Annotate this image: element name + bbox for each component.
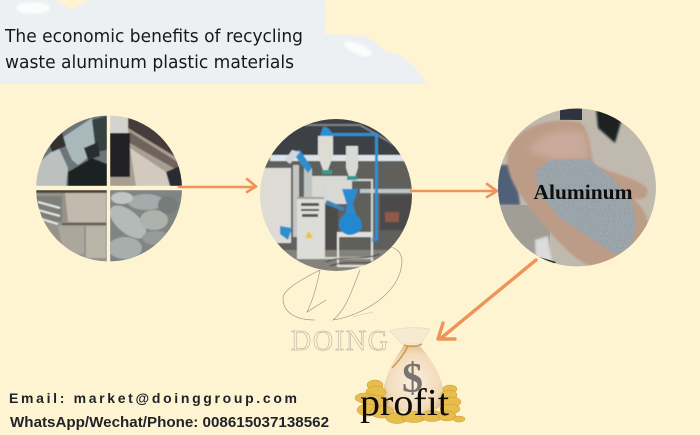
arrow: scrap to machine bbox=[179, 179, 256, 192]
hand bbox=[507, 120, 648, 266]
circle photo: hand with aluminum powder bbox=[495, 105, 660, 270]
label: Aluminum: Aluminum bbox=[534, 180, 633, 204]
photo dividers bbox=[107, 110, 110, 270]
icon: money bag with coins bbox=[355, 328, 465, 424]
bag rope bbox=[392, 344, 422, 368]
gold coins bbox=[355, 380, 465, 424]
dollar sign: $ bbox=[402, 356, 423, 402]
floor cables bbox=[326, 254, 385, 266]
title bbox=[4, 26, 303, 73]
label: profit: profit bbox=[360, 382, 449, 424]
logo watermark bbox=[283, 246, 402, 357]
circle photo: recycling machine bbox=[260, 119, 412, 271]
title: waste aluminum plastic materials bbox=[5, 52, 294, 73]
shoe bbox=[535, 236, 552, 262]
logo wordmark: DOING bbox=[291, 326, 388, 357]
machine frame bbox=[312, 176, 352, 204]
contact: phone: WhatsApp/Wechat/Phone: 008615037138562 bbox=[10, 414, 329, 431]
cloud banner bbox=[0, 0, 427, 84]
bag neck ruffle bbox=[390, 328, 430, 344]
bag body bbox=[383, 345, 444, 412]
arrow: aluminum to profit bbox=[438, 260, 536, 339]
contact: email: Email: market@doinggroup.com bbox=[9, 390, 297, 406]
circle photo: waste aluminum plastic materials bbox=[36, 116, 182, 262]
arrow: machine to aluminum bbox=[411, 184, 497, 197]
cyclones bbox=[318, 136, 333, 170]
quadrant: bagged scrap bbox=[36, 190, 107, 262]
warning label bbox=[305, 231, 313, 238]
quadrant: stacked sheets bbox=[110, 115, 184, 186]
aluminum powder pile bbox=[535, 160, 636, 254]
machine cabinet left bbox=[258, 168, 291, 243]
quadrant: grey sacks bbox=[110, 190, 182, 262]
control cabinet bbox=[297, 197, 324, 259]
title: The economic benefits of recycling bbox=[4, 26, 303, 47]
blue ducts bbox=[280, 127, 378, 242]
quadrant: shredded foil scrap bbox=[36, 115, 107, 186]
